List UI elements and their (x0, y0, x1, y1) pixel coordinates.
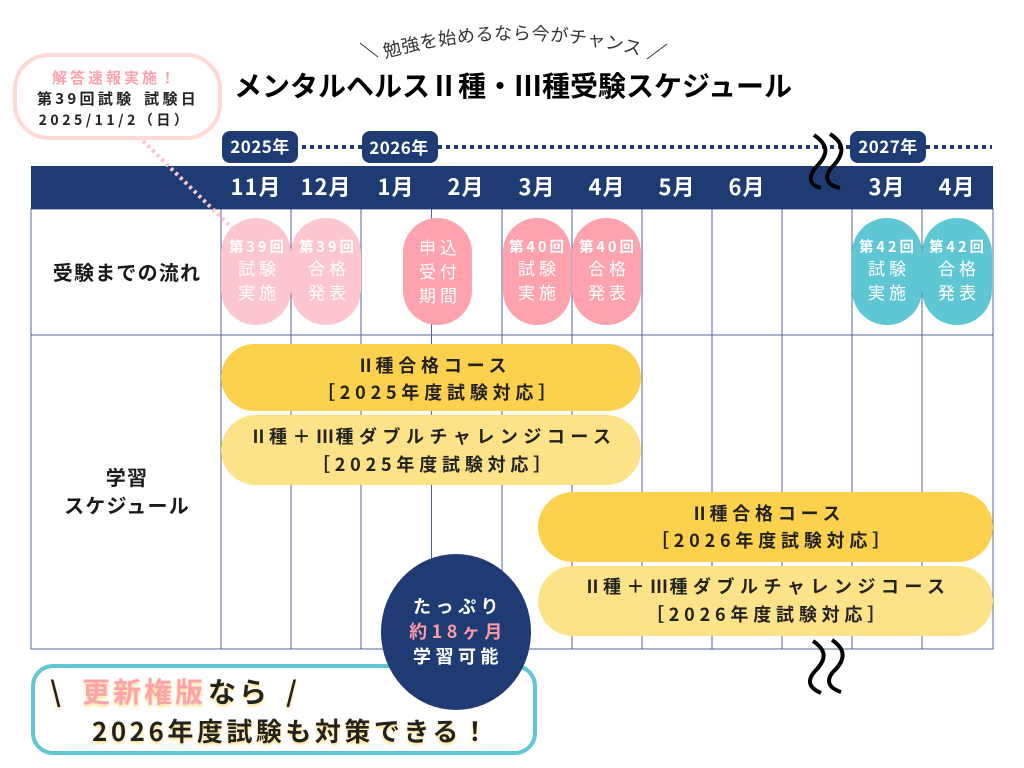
pill: 40 exam: 第40回 (509, 236, 567, 257)
pill: 40 result: 発表 (588, 279, 630, 304)
pill: 42 exam (852, 218, 922, 325)
pill: 42 exam: 第42回 (859, 236, 917, 257)
pill: 40 result: 合格 (588, 255, 630, 280)
title: メンタルヘルスⅡ種・Ⅲ種受験スケジュール (234, 65, 792, 105)
course bar: II+III 2025: Ⅱ種＋Ⅲ種ダブルチャレンジコース (250, 423, 616, 449)
pill: 39 exam: 実施 (238, 279, 280, 304)
month header: 1月 (378, 170, 414, 202)
pill: 42 result: 第42回 (929, 236, 987, 257)
pill: 40 exam: 実施 (518, 279, 560, 304)
icon: top break mark (811, 134, 841, 188)
callout: answer release (15, 55, 220, 138)
row heading: study schedule: 学習 (106, 462, 148, 491)
pill: application: 受付 (419, 258, 461, 283)
pill: 40 exam: 試験 (518, 255, 560, 280)
callout: update edition: 2026年度試験も対策できる！ (92, 712, 491, 749)
month header: 6月 (729, 170, 765, 202)
pill: 39 result: 合格 (308, 255, 350, 280)
badge: 18 months: たっぷり (413, 593, 503, 619)
badge: 18 months: 約18ヶ月 (409, 618, 507, 644)
course bar: II 2025 (221, 344, 641, 411)
pill: 40 result (572, 218, 641, 325)
pill: application: 申込 (419, 234, 461, 259)
curved subtitle: 勉強を始めるなら今がチャンス (383, 24, 640, 59)
pill: 39 exam (221, 218, 291, 325)
callout: update edition: \ (50, 671, 61, 711)
year 2025 (222, 131, 298, 163)
row heading: flow: 受験までの流れ (53, 257, 201, 286)
pill: 39 exam: 第39回 (229, 236, 287, 257)
month header: 2月 (448, 170, 484, 202)
pill: 42 exam: 試験 (868, 255, 910, 280)
pill: 39 exam: 試験 (238, 255, 280, 280)
pill: application (403, 218, 472, 325)
month header: 12月 (301, 170, 351, 202)
course bar: II 2025: ［2025年度試験対応］ (317, 379, 561, 405)
month header: 5月 (659, 170, 695, 202)
pill: 39 result: 発表 (308, 279, 350, 304)
badge: 18 months (381, 554, 531, 710)
pill: 40 result: 第40回 (579, 236, 637, 257)
pill: 42 result: 発表 (938, 279, 980, 304)
pill: 39 result: 第39回 (299, 236, 357, 257)
course bar: II 2025: Ⅱ種合格コース (357, 352, 511, 378)
month header: 3月 (519, 170, 555, 202)
course bar: II+III 2026: Ⅱ種＋Ⅲ種ダブルチャレンジコース (584, 573, 950, 599)
callout: update edition: 更新権版 (82, 671, 206, 711)
callout: update edition: / (286, 671, 297, 711)
dotted leader line (143, 141, 233, 229)
timeline: year markers (222, 131, 992, 163)
year 2027 (850, 131, 926, 163)
month header: 11月 (231, 170, 281, 202)
course bar: II 2026: Ⅱ種合格コース (691, 500, 845, 526)
month header (31, 166, 993, 209)
pill: application: 期間 (419, 282, 461, 307)
month header: 4月 (589, 170, 625, 202)
course bar: II+III 2026: ［2026年度試験対応］ (646, 601, 890, 627)
pill: 42 result (922, 218, 992, 325)
month header: 3月 (869, 170, 905, 202)
year 2027: 2027年 (858, 133, 918, 158)
pill: 42 exam: 実施 (868, 279, 910, 304)
callout: answer release: 解答速報実施！ (52, 67, 178, 88)
badge: 18 months: 学習可能 (413, 643, 503, 669)
year 2026: 2026年 (369, 134, 429, 159)
course bar: II 2026 (538, 492, 993, 562)
month header: 4月 (939, 170, 975, 202)
pill: 42 result: 合格 (938, 255, 980, 280)
pill: 40 exam (503, 218, 571, 325)
callout: answer release: 2025/11/2（日） (39, 110, 191, 130)
course bar: II+III 2025: ［2025年度試験対応］ (312, 451, 556, 477)
year 2026 (362, 131, 438, 163)
row heading: study schedule: スケジュール (64, 490, 190, 519)
year 2025: 2025年 (230, 133, 290, 158)
row heading: study schedule (64, 462, 190, 519)
course bar: II+III 2025 (221, 415, 641, 485)
course bar: II 2026: ［2026年度試験対応］ (651, 527, 895, 553)
course bar: II+III 2026 (538, 566, 993, 636)
pill: 39 result (291, 218, 361, 325)
callout: answer release: 第39回試験 試験日 (37, 88, 199, 109)
schedule table (31, 166, 993, 649)
callout: update edition: なら (208, 671, 270, 711)
icon: bottom break mark (810, 640, 843, 693)
callout: update edition (33, 666, 535, 753)
